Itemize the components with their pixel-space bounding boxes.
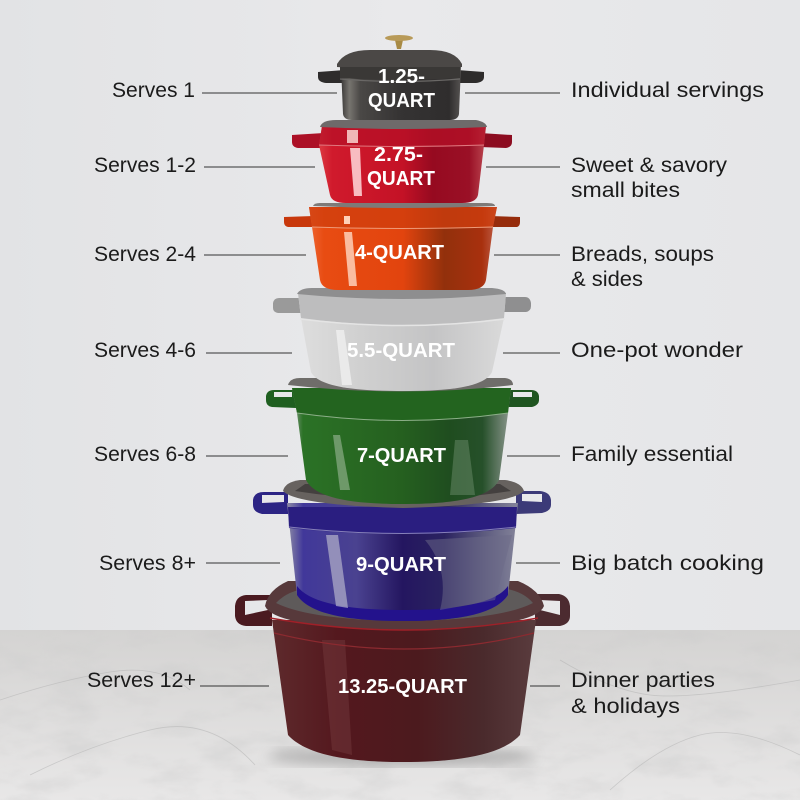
right handle — [490, 216, 520, 227]
body — [319, 126, 486, 203]
right use labels — [571, 79, 764, 718]
right use labels: small bites — [571, 179, 680, 202]
left handle — [235, 595, 272, 626]
body — [287, 503, 518, 621]
capacity labels: QUART — [368, 90, 435, 112]
left handle — [284, 216, 314, 227]
right handle — [480, 133, 512, 148]
wall background — [0, 0, 800, 630]
lid rim — [297, 288, 506, 299]
left handle — [266, 390, 296, 408]
pot: 2.75-quart — [292, 120, 512, 203]
lid rim — [313, 203, 495, 208]
right handle — [457, 70, 484, 83]
right use labels: Breads, soups — [571, 243, 714, 266]
pot: 4-quart — [284, 203, 520, 290]
left serving labels: Serves 6-8 — [94, 443, 196, 466]
body — [272, 620, 536, 762]
capacity labels: 1.25- — [378, 66, 425, 88]
lid rim — [265, 581, 544, 630]
left serving labels: Serves 2-4 — [94, 243, 196, 266]
left handle — [292, 133, 324, 148]
left handle — [318, 70, 345, 83]
left serving labels: Serves 12+ — [87, 669, 196, 692]
leader lines — [200, 93, 560, 686]
right use labels: Big batch cooking — [571, 552, 764, 575]
capacity labels: 5.5-QUART — [347, 340, 455, 362]
right handle — [508, 390, 539, 407]
right use labels: Individual servings — [571, 79, 764, 102]
body — [292, 388, 511, 504]
left handle — [253, 492, 288, 514]
right handle — [516, 491, 551, 514]
capacity labels: 9-QUART — [356, 554, 446, 576]
capacity labels: 2.75- — [374, 144, 423, 166]
pot: 1.25-quart — [318, 35, 484, 120]
knob — [385, 35, 413, 49]
body — [298, 293, 506, 391]
right handle — [503, 297, 531, 312]
left handle — [273, 298, 302, 313]
lid rim — [320, 120, 487, 129]
right use labels: Sweet & savory — [571, 154, 728, 177]
right use labels: Dinner parties — [571, 669, 715, 692]
left serving labels: Serves 1-2 — [94, 154, 196, 177]
body — [309, 207, 497, 290]
left serving labels: Serves 8+ — [99, 552, 196, 575]
left serving labels: Serves 4-6 — [94, 339, 196, 362]
right use labels: One-pot wonder — [571, 339, 743, 362]
right use labels: Family essential — [571, 443, 733, 466]
pot: 7-quart — [266, 378, 539, 504]
pot: 9-quart — [253, 480, 551, 621]
right use labels: & holidays — [571, 695, 680, 718]
left serving labels: Serves 1 — [112, 79, 195, 102]
capacity labels: 7-QUART — [357, 445, 446, 467]
capacity labels: QUART — [367, 168, 435, 190]
right use labels: & sides — [571, 268, 643, 291]
body — [341, 66, 461, 120]
capacity labels: 4-QUART — [355, 242, 444, 264]
capacity labels: 13.25-QUART — [338, 676, 467, 698]
marble countertop — [0, 630, 800, 800]
pot: 13.25-quart — [235, 581, 570, 762]
lid rim — [283, 480, 524, 508]
lid — [337, 50, 462, 70]
left serving labels — [87, 79, 196, 692]
lid rim — [288, 378, 513, 392]
capacity labels — [338, 66, 467, 698]
pot: 5.5-quart — [273, 288, 531, 391]
right handle — [535, 594, 570, 626]
